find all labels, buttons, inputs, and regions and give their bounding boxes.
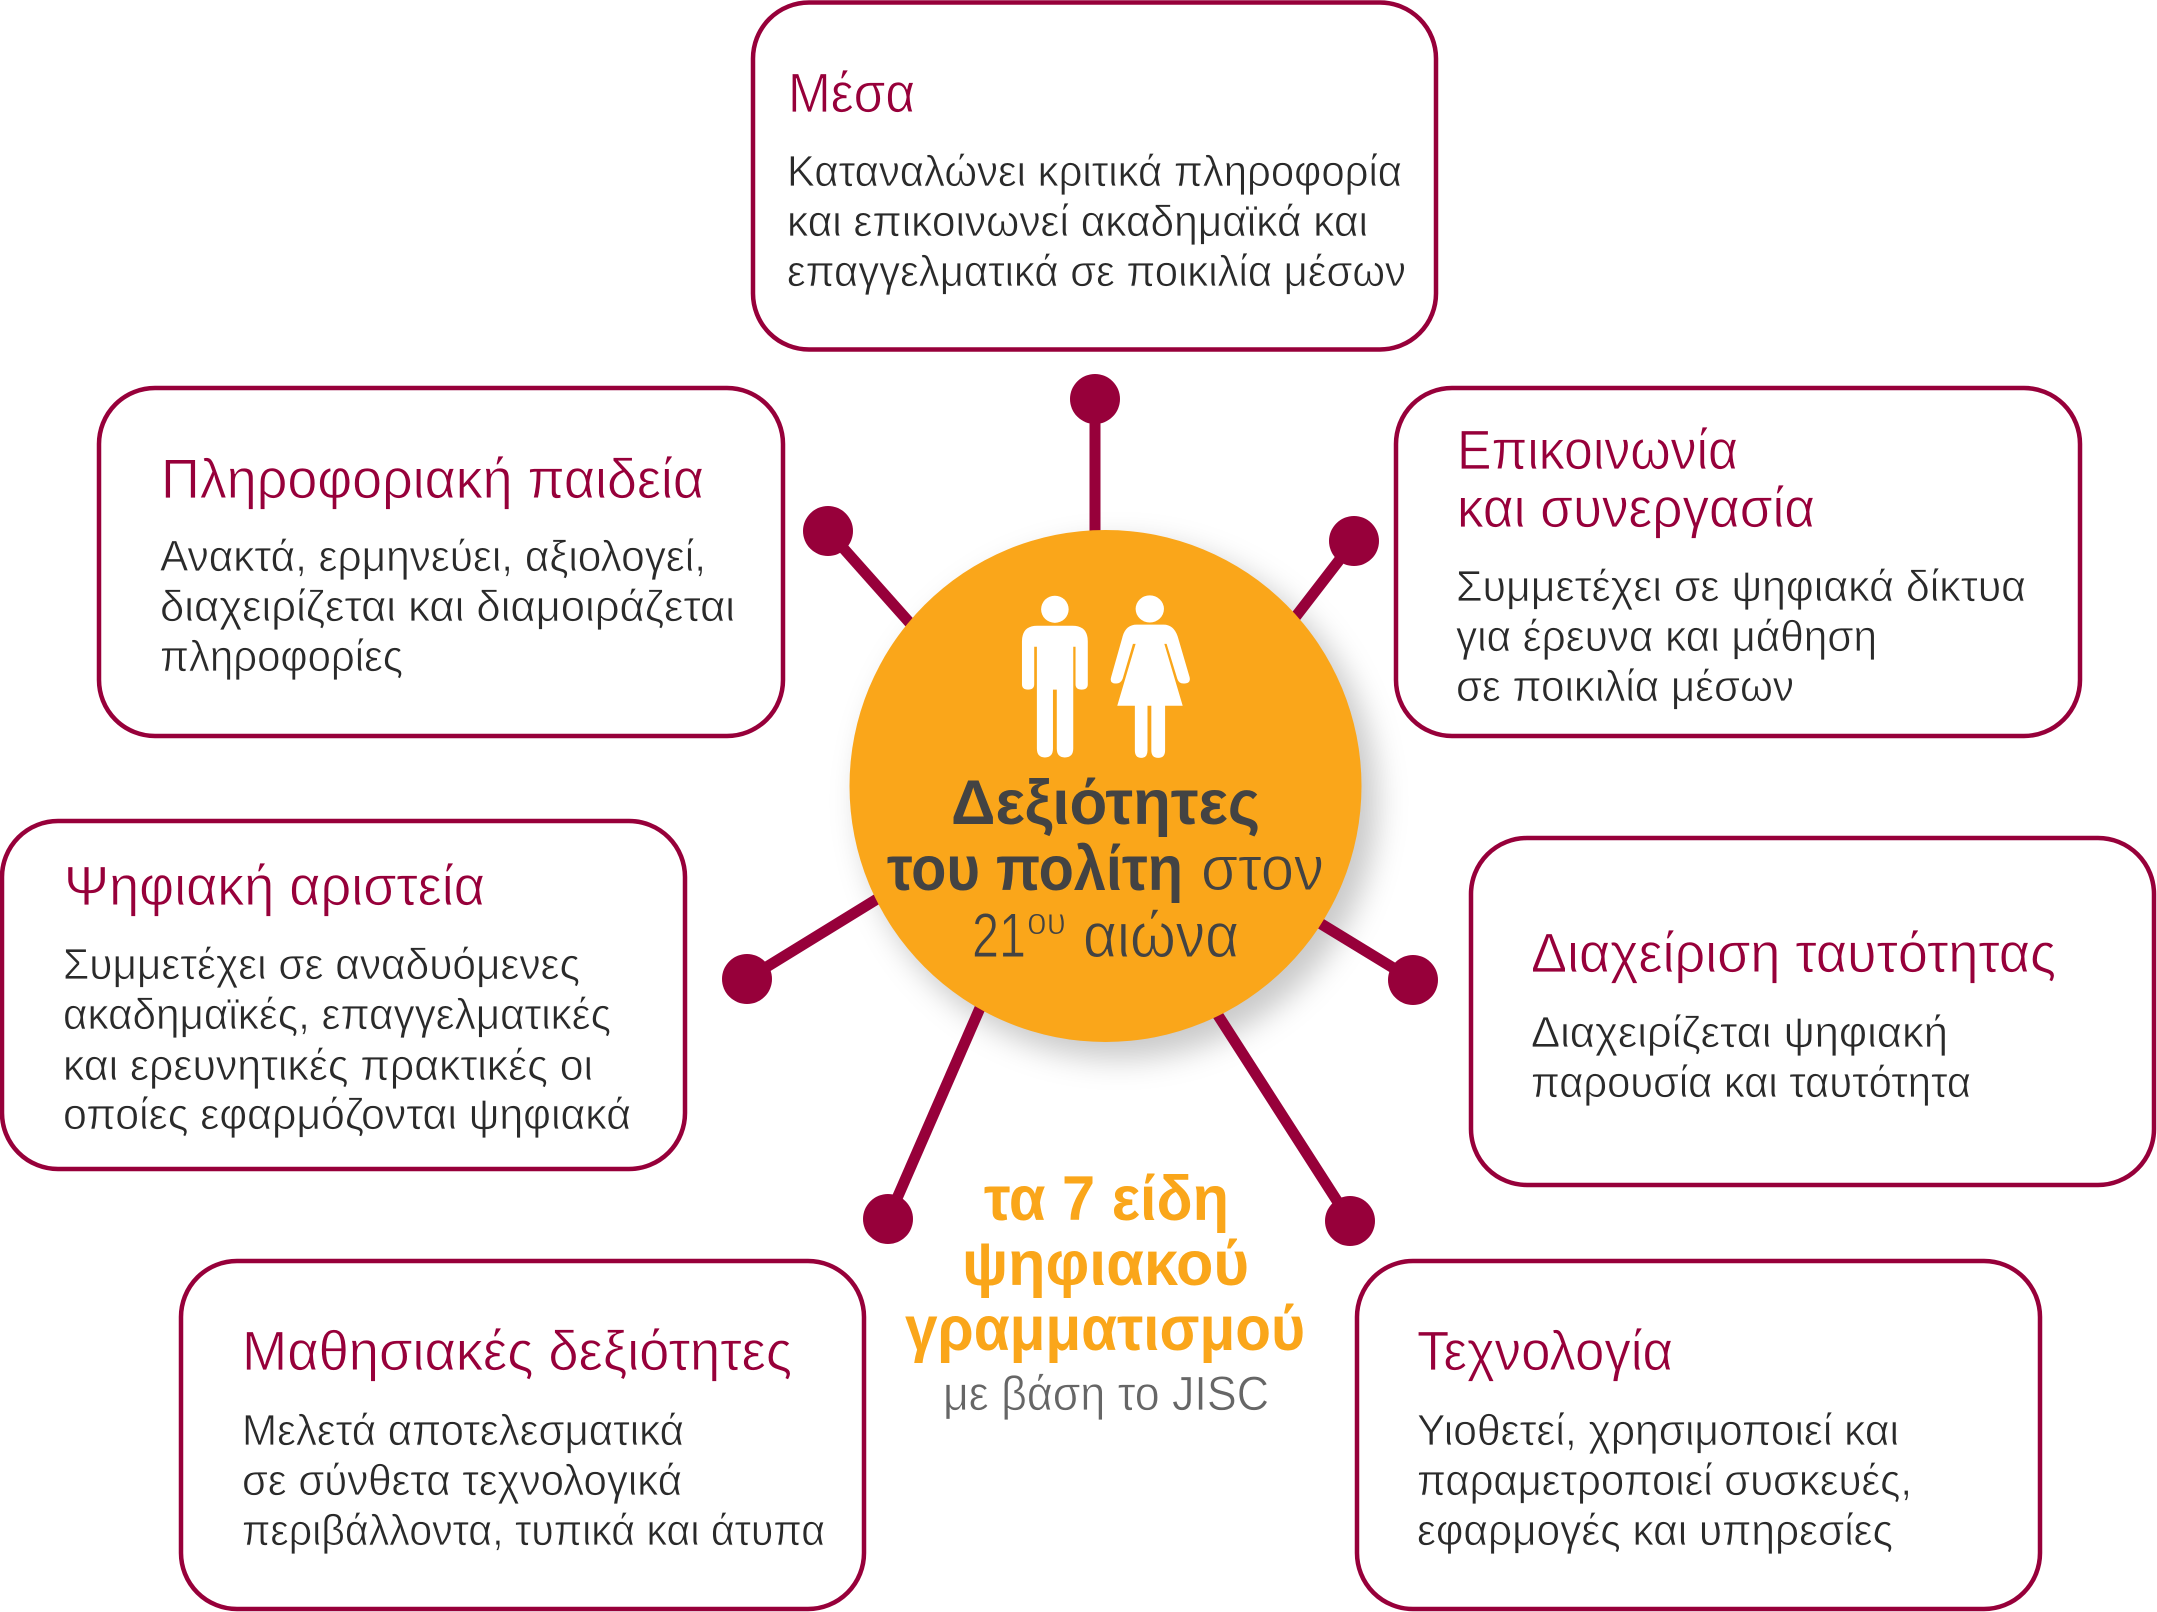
text: Μαθησιακές δεξιότητες description: περιβάλλοντα, τυπικά και άτυπα xyxy=(242,1506,825,1555)
central circle xyxy=(850,530,1362,1042)
title: Δεξιότητες του πολίτη στον 21ου αιώνα: στον xyxy=(1201,834,1324,904)
text: Πληροφοριακή παιδεία description: διαχειρίζεται και διαμοιράζεται xyxy=(160,582,735,631)
text: Επικοινωνία description: σε ποικιλία μέσων xyxy=(1456,662,1794,711)
text: Μέσα description xyxy=(787,147,1406,296)
circle shadow xyxy=(861,543,1377,1059)
title: Δεξιότητες του πολίτη στον 21ου αιώνα: ου xyxy=(1027,901,1066,943)
text: Μέσα description: και επικοινωνεί ακαδημαϊκά και xyxy=(787,197,1368,246)
title: Δεξιότητες του πολίτη στον 21ου αιώνα: 21 xyxy=(972,901,1026,971)
icon: man xyxy=(1022,596,1088,757)
heading: Διαχείριση ταυτότητας: Διαχείριση ταυτότητας xyxy=(1531,921,2056,984)
heading: Πληροφοριακή παιδεία: Πληροφοριακή παιδεία xyxy=(161,447,704,510)
text: Ψηφιακή αριστεία description xyxy=(63,940,631,1139)
title: Δεξιότητες του πολίτη στον 21ου αιώνα: Δεξιότητες xyxy=(951,768,1260,838)
heading: Επικοινωνία και συνεργασία xyxy=(1457,418,1815,539)
text: Διαχείριση ταυτότητας description: παρουσία και ταυτότητα xyxy=(1531,1058,1971,1107)
text: Μέσα description: Καταναλώνει κριτικά πληροφορία xyxy=(787,147,1402,196)
heading: Ψηφιακή αριστεία: Ψηφιακή αριστεία xyxy=(64,854,485,917)
icon: man and woman figures xyxy=(1022,595,1190,758)
caption: τα 7 είδη ψηφιακού γραμματισμού με βάση το JISC xyxy=(905,1164,1305,1421)
icon: woman xyxy=(1111,595,1190,758)
text: Μαθησιακές δεξιότητες description: Μελετά αποτελεσματικά xyxy=(242,1406,684,1455)
caption: τα 7 είδη ψηφιακού γραμματισμού με βάση το JISC: με βάση το JISC xyxy=(943,1368,1269,1421)
text: Διαχείριση ταυτότητας description: Διαχειρίζεται ψηφιακή xyxy=(1531,1008,1948,1057)
panel: Διαχείριση ταυτότητας xyxy=(1471,838,2154,1185)
title: Δεξιότητες του πολίτη στον 21ου αιώνα: του πολίτη xyxy=(887,834,1183,904)
heading: Μέσα: Μέσα xyxy=(788,61,915,124)
panel: Τεχνολογία xyxy=(1357,1261,2040,1609)
heading: Επικοινωνία και συνεργασία: και συνεργασία xyxy=(1457,476,1815,539)
text: Πληροφοριακή παιδεία description: πληροφορίες xyxy=(160,632,403,681)
panel: Ψηφιακή αριστεία xyxy=(2,821,685,1169)
text: Τεχνολογία description: παραμετροποιεί συσκευές, xyxy=(1417,1456,1912,1505)
text: Ψηφιακή αριστεία description: ακαδημαϊκές, επαγγελματικές xyxy=(63,990,611,1039)
text: Τεχνολογία description xyxy=(1417,1406,1912,1555)
caption: τα 7 είδη ψηφιακού γραμματισμού με βάση το JISC: τα 7 είδη xyxy=(984,1164,1229,1234)
text: Ψηφιακή αριστεία description: Συμμετέχει σε αναδυόμενες xyxy=(63,940,580,989)
heading: Επικοινωνία και συνεργασία: Επικοινωνία xyxy=(1457,418,1738,481)
text: Πληροφοριακή παιδεία description xyxy=(160,532,735,681)
text: Επικοινωνία description: Συμμετέχει σε ψηφιακά δίκτυα xyxy=(1456,562,2026,611)
text: Τεχνολογία description: Υιοθετεί, χρησιμοποιεί και xyxy=(1417,1406,1899,1455)
text: Μέσα description: επαγγελματικά σε ποικιλία μέσων xyxy=(787,247,1406,296)
text: Ψηφιακή αριστεία description: και ερευνητικές πρακτικές οι xyxy=(63,1041,593,1090)
caption: τα 7 είδη ψηφιακού γραμματισμού με βάση το JISC: ψηφιακού xyxy=(962,1229,1249,1299)
text: Ψηφιακή αριστεία description: οποίες εφαρμόζονται ψηφιακά xyxy=(63,1090,631,1139)
text: Μαθησιακές δεξιότητες description xyxy=(242,1406,825,1555)
text: Επικοινωνία description xyxy=(1456,562,2026,711)
panel: Πληροφοριακή παιδεία xyxy=(99,388,783,736)
title: Δεξιότητες του πολίτη στον 21ου αιώνα: αιώνα xyxy=(1083,901,1239,971)
title: Δεξιότητες του πολίτη στον 21ου αιώνα xyxy=(887,768,1324,971)
text: Τεχνολογία description: εφαρμογές και υπηρεσίες xyxy=(1417,1506,1893,1555)
panel: Μαθησιακές δεξιότητες xyxy=(181,1261,864,1609)
panel: Επικοινωνία και συνεργασία xyxy=(1396,388,2080,736)
text: Μαθησιακές δεξιότητες description: σε σύνθετα τεχνολογικά xyxy=(242,1456,682,1505)
heading: Μαθησιακές δεξιότητες: Μαθησιακές δεξιότητες xyxy=(242,1319,792,1382)
heading: Τεχνολογία: Τεχνολογία xyxy=(1417,1319,1673,1382)
caption: τα 7 είδη ψηφιακού γραμματισμού με βάση το JISC: γραμματισμού xyxy=(905,1294,1305,1364)
text: Επικοινωνία description: για έρευνα και μάθηση xyxy=(1456,612,1877,661)
connectors: spokes and dots xyxy=(722,374,1438,1246)
panel: Μέσα xyxy=(753,2,1436,350)
text: Πληροφοριακή παιδεία description: Ανακτά, ερμηνεύει, αξιολογεί, xyxy=(160,532,706,581)
text: Διαχείριση ταυτότητας description xyxy=(1531,1008,1971,1107)
